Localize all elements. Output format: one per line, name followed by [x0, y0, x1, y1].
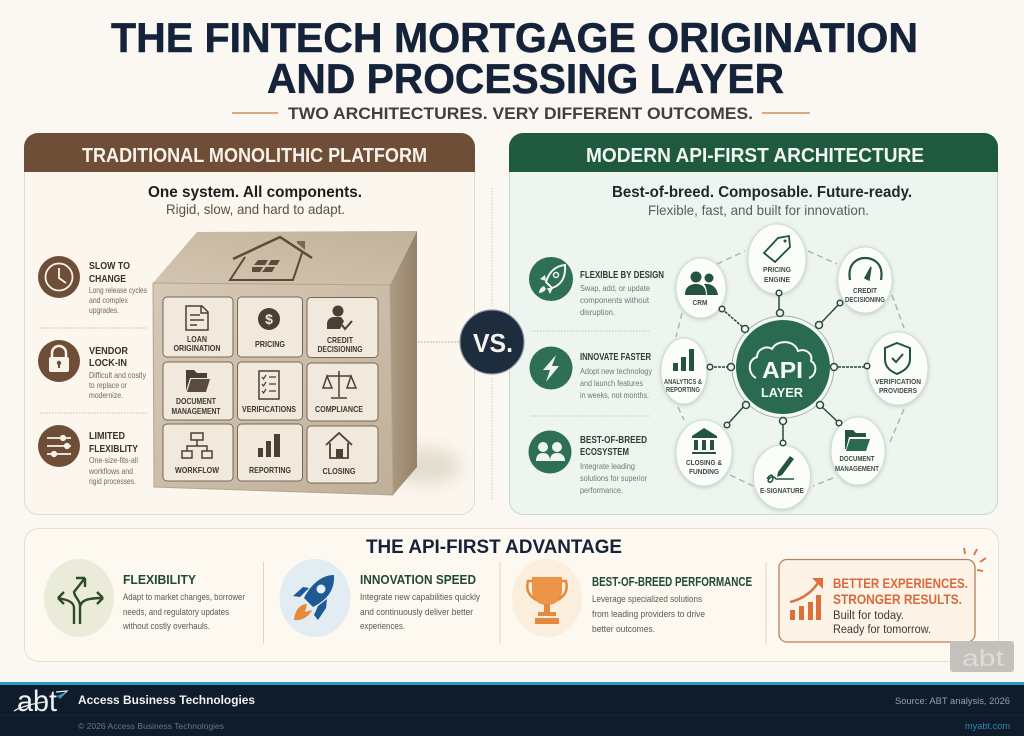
icon: house on block — [230, 237, 312, 280]
watermark logo — [950, 641, 1014, 672]
panel header: modern — [509, 133, 998, 172]
node: e-signature — [754, 445, 810, 509]
tile: credit decisioning: CREDIT — [327, 335, 354, 345]
api layer hub: API — [762, 357, 803, 383]
title — [111, 14, 918, 102]
tile: credit decisioning: DECISIONING — [318, 344, 363, 354]
tile: verifications: VERIFICATIONS — [242, 404, 296, 414]
item: innovate faster — [530, 346, 653, 400]
subtitle: TWO ARCHITECTURES. VERY DIFFERENT OUTCOMES. — [288, 104, 753, 123]
tile grid — [163, 297, 378, 483]
advantage: best-of-breed performance: better outcomes. — [592, 624, 655, 634]
tile: workflow — [175, 433, 220, 475]
node: closing and funding: CLOSING & — [686, 458, 723, 467]
connectors — [710, 293, 867, 443]
advantage: best-of-breed performance: BEST-OF-BREED PERFORMANCE — [592, 574, 752, 589]
item: vendor lock-in: Difficult and costly — [89, 370, 147, 380]
tile: closing — [322, 433, 356, 476]
vs badge: VS. — [473, 328, 513, 358]
advantage: flexibility — [44, 559, 245, 637]
advantage: innovation speed: INNOVATION SPEED — [360, 572, 476, 587]
panel header: modern: MODERN API-FIRST ARCHITECTURE — [586, 145, 924, 167]
tile: compliance: COMPLIANCE — [315, 404, 363, 414]
vs badge — [460, 310, 524, 374]
tile: workflow: WORKFLOW — [175, 465, 220, 475]
item: slow to change: upgrades. — [89, 305, 119, 315]
footer copyright: © 2026 Access Business Technologies — [78, 721, 224, 731]
callout: better experiences: BETTER EXPERIENCES. — [833, 575, 968, 591]
item: best-of-breed ecosystem — [528, 430, 647, 495]
api layer hub — [732, 316, 834, 418]
footer website: myabt.com — [965, 721, 1010, 731]
item: innovate faster: and launch features — [580, 378, 643, 388]
node: crm: CRM — [692, 298, 708, 307]
advantage: best-of-breed performance: Leverage specialized solutions — [592, 594, 702, 604]
tile: verifications — [242, 371, 296, 414]
item: limited flexibility: LIMITED — [89, 430, 125, 442]
footer company name: Access Business Technologies — [78, 695, 255, 707]
tile: document management: MANAGEMENT — [172, 406, 221, 416]
advantage: flexibility: FLEXIBILITY — [123, 572, 196, 587]
abt logo: abt — [17, 685, 58, 718]
node: analytics and reporting: ANALYTICS & — [664, 377, 702, 386]
node: document management — [831, 417, 885, 485]
panel header: traditional: TRADITIONAL MONOLITHIC PLATFORM — [82, 145, 427, 167]
item: limited flexibility — [38, 425, 138, 486]
item: best-of-breed ecosystem: solutions for superior — [580, 473, 647, 483]
node: document management: DOCUMENT — [840, 454, 875, 463]
node: closing and funding — [676, 420, 732, 486]
node: analytics and reporting — [661, 338, 707, 404]
footer source: Source: ABT analysis, 2026 — [895, 696, 1010, 706]
tile: pricing: $ — [265, 311, 273, 327]
tile: pricing: PRICING — [255, 339, 285, 349]
node: crm — [676, 258, 726, 318]
versus divider — [418, 188, 524, 500]
item: slow to change: SLOW TO — [89, 260, 130, 272]
callout: better experiences: Ready for tomorrow. — [833, 624, 931, 636]
item: limited flexibility: rigid processes. — [89, 476, 136, 486]
tile: loan origination — [174, 306, 220, 353]
advantage: best-of-breed performance — [512, 559, 752, 637]
node: pricing engine: PRICING — [763, 265, 791, 274]
item: best-of-breed ecosystem: Integrate leading — [580, 461, 635, 471]
advantage: flexibility: needs, and regulatory updates — [123, 607, 229, 617]
advantage: innovation speed — [280, 559, 480, 637]
watermark logo: abt — [962, 645, 1005, 671]
advantage: best-of-breed performance: from leading providers to drive — [592, 609, 705, 619]
node: credit decisioning: CREDIT — [853, 286, 877, 295]
item: flexible by design: FLEXIBLE BY DESIGN — [580, 269, 664, 281]
node: verification providers: VERIFICATION — [875, 377, 921, 386]
callout: better experiences: STRONGER RESULTS. — [833, 591, 962, 607]
panel: traditional monolithic platform — [24, 133, 475, 514]
tile: compliance — [315, 371, 363, 414]
panel: the api-first advantage — [24, 528, 998, 662]
item: vendor lock-in: LOCK-IN — [89, 357, 127, 369]
tile: closing: CLOSING — [322, 466, 356, 476]
tile: document management: DOCUMENT — [176, 396, 217, 406]
item: innovate faster: Adopt new technology — [580, 366, 653, 376]
node: document management: MANAGEMENT — [835, 464, 879, 473]
tile: document management — [172, 370, 221, 416]
item: flexible by design: disruption. — [580, 307, 615, 317]
tile: pricing — [255, 308, 285, 349]
item: slow to change: CHANGE — [89, 273, 126, 285]
item: slow to change: and complex — [89, 295, 129, 305]
item: best-of-breed ecosystem: BEST-OF-BREED — [580, 434, 647, 446]
advantage: innovation speed: Integrate new capabilities quickly — [360, 592, 480, 602]
node: closing and funding: FUNDING — [689, 467, 719, 476]
item: vendor lock-in: modernize. — [89, 390, 123, 400]
node: e-signature: E-SIGNATURE — [760, 486, 804, 495]
panel: modern api-first architecture — [509, 133, 998, 514]
item: flexible by design — [529, 257, 664, 317]
api layer hub: LAYER — [761, 385, 804, 400]
node: pricing engine — [748, 224, 806, 294]
callout: better experiences — [779, 548, 986, 642]
footer — [0, 682, 1024, 736]
item: slow to change — [38, 256, 147, 315]
item: flexible by design: components without — [580, 295, 650, 305]
panel tagline: traditional — [148, 184, 362, 217]
node: verification providers: PROVIDERS — [879, 386, 917, 395]
advantage: innovation speed: experiences. — [360, 621, 405, 631]
panel tagline: modern: Best-of-breed. Composable. Future-ready. — [612, 184, 912, 201]
item: innovate faster: in weeks, not months. — [580, 390, 649, 400]
panel header: traditional — [24, 133, 475, 172]
title: THE FINTECH MORTGAGE ORIGINATION — [111, 14, 918, 61]
node: credit decisioning: DECISIONING — [845, 295, 885, 304]
tile: loan origination: ORIGINATION — [174, 343, 220, 353]
tile: credit decisioning — [318, 306, 363, 354]
monolith block — [153, 231, 461, 495]
item: limited flexibility: FLEXIBLITY — [89, 443, 138, 455]
item: best-of-breed ecosystem: ECOSYSTEM — [580, 446, 629, 458]
advantage: flexibility: Adapt to market changes, borrower — [123, 592, 245, 602]
panel tagline: modern: Flexible, fast, and built for innovation. — [648, 202, 869, 218]
advantage: flexibility: without costly overhauls. — [122, 621, 210, 631]
item: best-of-breed ecosystem: performance. — [580, 485, 623, 495]
node: verification providers — [868, 332, 928, 405]
tile: reporting: REPORTING — [249, 465, 291, 475]
callout: better experiences: Built for today. — [833, 610, 904, 622]
item: flexible by design: Swap, add, or update — [580, 283, 650, 293]
item: limited flexibility: One-size-fits-all — [89, 455, 138, 465]
panel tagline: traditional: One system. All components. — [148, 184, 362, 201]
item: vendor lock-in: to replace or — [89, 380, 127, 390]
node: analytics and reporting: REPORTING — [666, 385, 700, 394]
tile: reporting — [249, 434, 291, 475]
item: vendor lock-in — [38, 340, 147, 400]
item: innovate faster: INNOVATE FASTER — [580, 351, 651, 363]
title: AND PROCESSING LAYER — [267, 55, 784, 102]
advantage heading: THE API-FIRST ADVANTAGE — [366, 537, 622, 558]
connector ports — [707, 290, 870, 446]
panel tagline: traditional: Rigid, slow, and hard to adapt. — [166, 201, 345, 217]
node: credit decisioning — [838, 247, 892, 313]
item: slow to change: Long release cycles — [89, 285, 147, 295]
tile: loan origination: LOAN — [187, 334, 207, 344]
node: pricing engine: ENGINE — [764, 275, 790, 284]
item: vendor lock-in: VENDOR — [89, 345, 128, 357]
hub diagram — [661, 224, 928, 509]
panel tagline: modern — [612, 184, 912, 218]
advantage: innovation speed: and continuously deliver better — [360, 607, 473, 617]
item: limited flexibility: workflows and — [88, 466, 133, 476]
